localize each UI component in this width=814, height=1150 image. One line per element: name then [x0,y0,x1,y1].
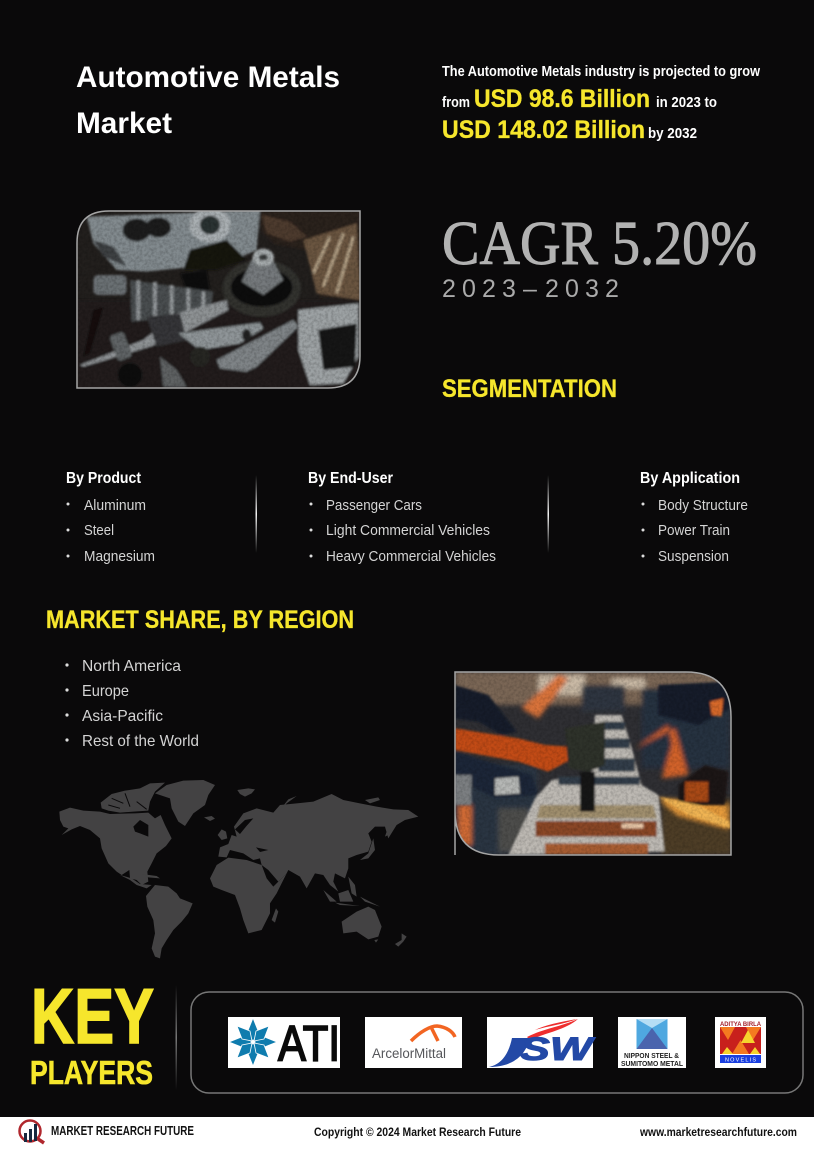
segment column: by product: Steel [84,522,114,539]
CAGR value: CAGR 5.20% [442,210,757,278]
segment column: by application: Body Structure [658,497,748,514]
map: northern islands [280,796,393,837]
map: arctic islands [101,783,165,813]
map: greenland [155,780,215,826]
map: south america [146,885,193,958]
market share heading: MARKET SHARE, BY REGION [46,606,354,634]
title [76,61,340,140]
market size statement [442,64,761,144]
segmentation heading: SEGMENTATION [442,375,617,403]
segment column: by application [640,470,748,565]
map: eurasia [218,794,418,892]
logo: ArcelorMittal: ArcelorMittal [372,1046,446,1061]
map: north america [59,808,172,885]
logo: Nippon Steel and Sumitomo Metal: NIPPON STEEL & [624,1053,679,1060]
market size statement: USD 148.02 Billion [442,116,645,144]
map: new zealand [374,933,407,947]
photo: disassembled gearbox parts [77,208,360,390]
title: Market [76,107,172,140]
key players heading: KEY [31,972,154,1060]
segment column: by end-user [308,470,496,565]
region list [65,658,199,750]
segment column: by end-user: Light Commercial Vehicles [326,522,490,539]
map: central america and caribbean [120,874,160,888]
region list: Asia-Pacific [82,708,163,725]
segment column: by product: Magnesium [84,548,155,565]
forecast period: 2023 – 2032 [442,275,619,303]
icon: market research future logo [20,1120,44,1143]
market size statement: from [442,95,470,111]
footer brand name: MARKET RESEARCH FUTURE [51,1124,194,1138]
footer bar [0,1117,814,1150]
photo: robotic car assembly line [455,672,732,855]
market size statement: USD 98.6 Billion [474,85,650,113]
segment column: by product: By Product [66,470,142,487]
segment column: by application: By Application [640,470,740,487]
title: Automotive Metals [76,61,340,94]
segment column: by end-user: By End-User [308,470,393,487]
market size statement: The Automotive Metals industry is projected to grow [442,64,761,80]
key players panel [191,992,803,1093]
logo: Nippon Steel and Sumitomo Metal: SUMITOMO METAL [621,1061,684,1068]
logo: ArcelorMittal [365,1017,462,1068]
map: southeast asia islands [323,877,380,907]
map: australia [342,907,382,939]
logo: Aditya Birla Novelis: NOVELIS [725,1058,756,1064]
map: svalbard [237,788,255,797]
logo: Aditya Birla Novelis [715,1017,766,1068]
logo: Aditya Birla Novelis: ADITYA BIRLA [720,1022,762,1028]
segment column: by product [66,470,155,565]
market size statement: in 2023 to [656,95,717,111]
key players heading [30,972,154,1091]
region list: North America [82,658,181,675]
logo: ATI: ATI [278,1016,340,1072]
logo: ATI [228,1016,340,1072]
map: japan [360,838,375,860]
logo: Nippon Steel and Sumitomo Metal [618,1017,686,1068]
region list: Rest of the World [82,733,199,750]
map: madagascar [272,908,278,923]
segment column: by product: Aluminum [84,497,146,514]
map: iceland [204,816,215,821]
segment column: by end-user: Heavy Commercial Vehicles [326,548,496,565]
region list: Europe [82,683,129,700]
map: british isles [218,829,227,840]
segment column: by end-user: Passenger Cars [326,497,422,514]
segment column: by application: Suspension [658,548,729,565]
footer copyright: Copyright © 2024 Market Research Future [314,1125,521,1139]
key players heading: PLAYERS [30,1054,153,1091]
logo: JSW: SW [520,1031,596,1067]
segment column: by application: Power Train [658,522,730,539]
map: africa [210,858,287,933]
world map [59,780,418,958]
market size statement: by 2032 [648,126,697,142]
logo: JSW [487,1017,596,1068]
